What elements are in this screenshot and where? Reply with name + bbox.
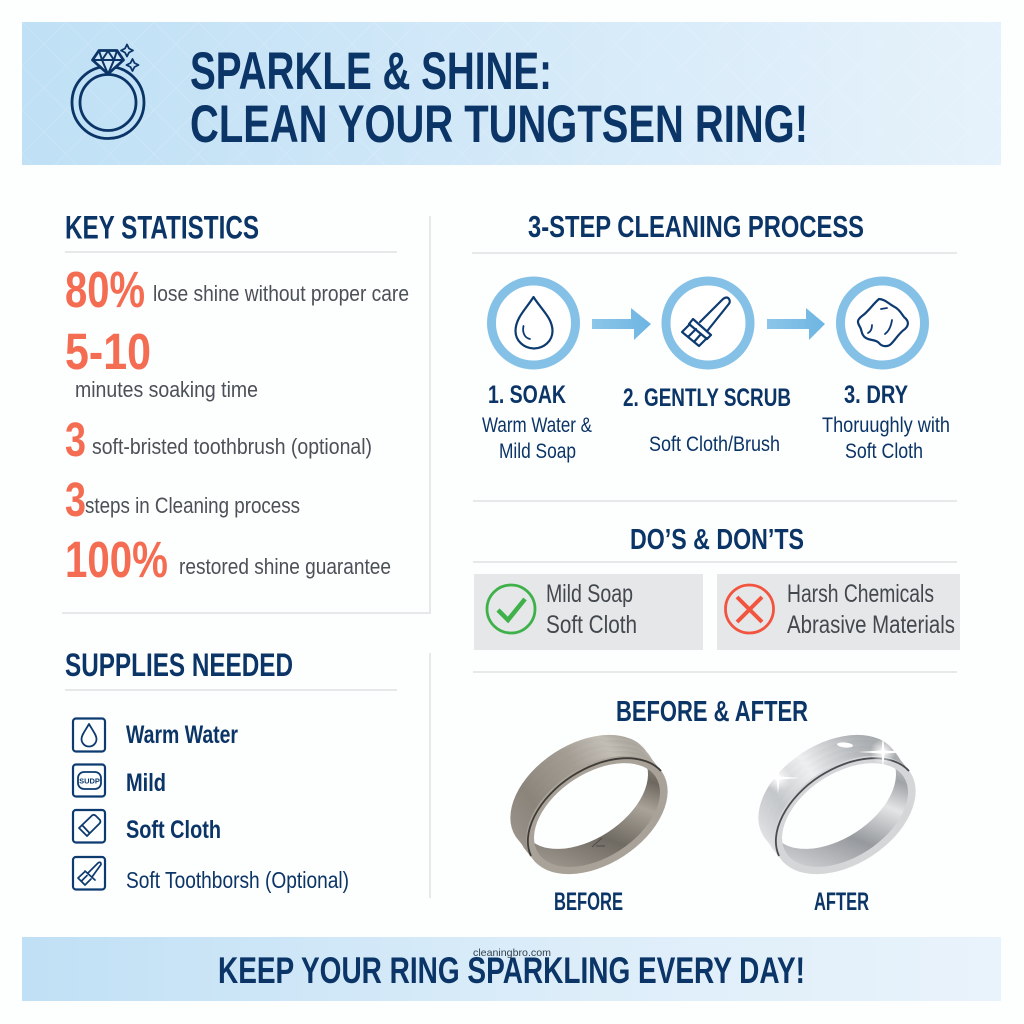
do box: Soft Cloth xyxy=(546,611,637,639)
supply: soft toothbrush xyxy=(73,857,349,893)
footer banner: KEEP YOUR RING SPARKLING EVERY DAY! xyxy=(218,950,805,991)
stat: 100%: 100% xyxy=(65,531,168,588)
do box xyxy=(474,574,703,650)
step 1: soak: Mild Soap xyxy=(499,440,576,463)
supply: warm water: Warm Water xyxy=(126,721,238,749)
step 2: gently scrub: 2. GENTLY SCRUB xyxy=(623,384,791,412)
title: CLEAN YOUR TUNGTSEN RING! xyxy=(190,95,808,154)
do box: Mild Soap xyxy=(546,580,633,608)
supply: warm water xyxy=(73,718,238,752)
stat: 3 steps: steps in Cleaning process xyxy=(85,493,300,518)
stat: 100% xyxy=(65,531,391,588)
title xyxy=(190,42,808,154)
caption: before: BEFORE xyxy=(554,888,623,916)
step 3: dry xyxy=(822,281,950,463)
stat: 80% xyxy=(65,261,409,318)
stat: 3 steps xyxy=(65,474,300,527)
supply: mild soap: Mild xyxy=(126,769,166,797)
supply: soft cloth: Soft Cloth xyxy=(126,816,221,844)
don't box: Harsh Chemicals xyxy=(787,580,934,608)
step 1: soak: 1. SOAK xyxy=(488,381,566,409)
footer banner xyxy=(22,937,1001,1001)
arrow: step 1 to 2 xyxy=(592,308,651,340)
ring: before xyxy=(510,734,668,874)
caption: after: AFTER xyxy=(814,888,869,916)
heading: process: 3-STEP CLEANING PROCESS xyxy=(528,209,864,244)
step 1: soak: Warm Water & xyxy=(482,414,592,437)
heading: key statistics: KEY STATISTICS xyxy=(65,210,259,246)
supply: soft cloth xyxy=(73,810,221,844)
sparkles xyxy=(756,735,908,794)
heading: supplies needed: SUPPLIES NEEDED xyxy=(65,647,293,683)
step 2: gently scrub xyxy=(623,281,791,456)
header banner xyxy=(22,22,1001,165)
stat: 3 toothbrush: 3 xyxy=(65,414,86,467)
supply: soft toothbrush: Soft Toothborsh (Optional) xyxy=(126,867,349,893)
stat: 5-10: 5-10 xyxy=(65,323,151,380)
stat: 3 toothbrush: soft-bristed toothbrush (optional) xyxy=(92,434,372,459)
panel: supplies needed xyxy=(65,647,397,893)
stat: 80%: lose shine without proper care xyxy=(153,281,409,306)
stat: 80%: 80% xyxy=(65,261,145,318)
step 1: soak xyxy=(482,281,592,463)
icon: ring with diamond xyxy=(72,44,144,138)
heading: before and after: BEFORE & AFTER xyxy=(616,696,808,728)
supply: mild soap xyxy=(73,764,166,797)
arrow: step 2 to 3 xyxy=(767,308,825,340)
panel: key statistics xyxy=(65,210,409,588)
don't box: Abrasive Materials xyxy=(787,611,955,639)
stat: 5-10 xyxy=(65,323,258,402)
step 3: dry: Thoruughly with xyxy=(822,414,950,437)
footer banner: cleaningbro.com xyxy=(473,947,551,959)
stat: 5-10: minutes soaking time xyxy=(75,377,258,402)
step 3: dry: 3. DRY xyxy=(844,381,908,409)
heading: do's and don'ts: DO’S & DON’TS xyxy=(630,524,804,556)
stat: 100%: restored shine guarantee xyxy=(179,554,391,579)
step 3: dry: Soft Cloth xyxy=(845,440,923,463)
step 2: gently scrub: Soft Cloth/Brush xyxy=(649,433,780,456)
ring: after xyxy=(758,734,916,874)
title: SPARKLE & SHINE: xyxy=(190,42,552,101)
panel: do's and don'ts xyxy=(473,524,960,650)
panel: 3-step cleaning process xyxy=(472,209,957,463)
don't box xyxy=(717,574,960,650)
supply: mild soap: SUDP xyxy=(79,776,100,786)
panel: before and after xyxy=(510,700,916,910)
stat: 3 toothbrush xyxy=(65,414,372,467)
stat: 3 steps: 3 xyxy=(65,474,86,527)
